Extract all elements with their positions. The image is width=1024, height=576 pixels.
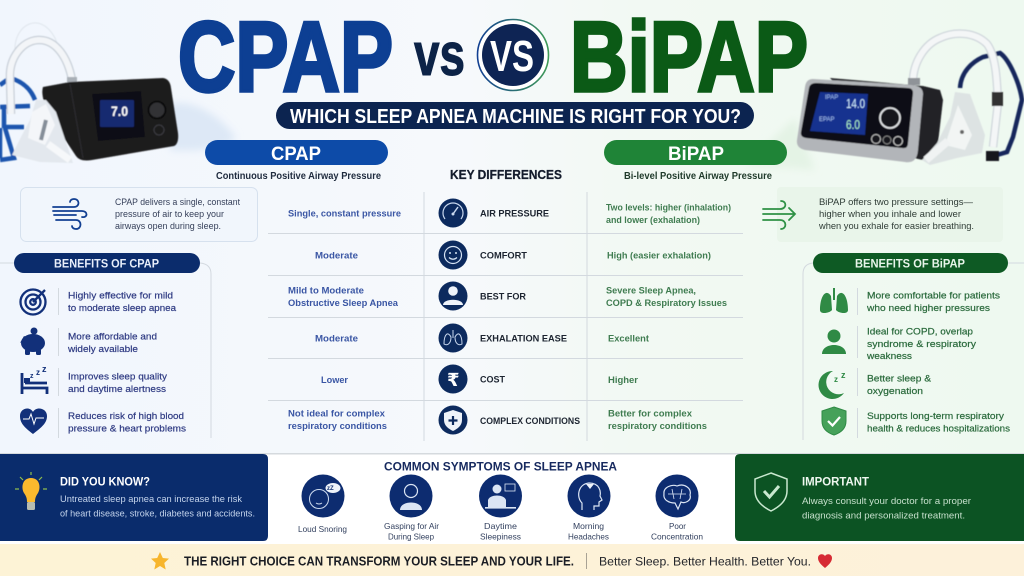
icon: person	[438, 282, 468, 310]
icon: star	[151, 552, 169, 570]
column: criteria: COST	[480, 374, 505, 386]
panel: BiPAP description	[763, 187, 1003, 242]
text: BiPAP description: BiPAP offers two pressure settings—	[819, 197, 973, 208]
benefit list: BiPAP: More comfortable for patients	[867, 290, 1000, 302]
column: CPAP values: Moderate	[315, 250, 358, 262]
text: did you know body: Untreated sleep apnea can increase the risk	[60, 494, 242, 505]
benefit list: BiPAP: Supports long-term respiratory	[867, 411, 1004, 422]
column: BiPAP values: Two levels: higher (inhalation)	[606, 202, 731, 214]
symptom: gasping for air: Gasping for Air	[384, 521, 439, 531]
header: BiPAP column: Bi-level Positive Airway Pressure	[624, 171, 772, 182]
panel: common symptoms	[298, 460, 703, 542]
icon: lungs	[438, 324, 468, 352]
column: BiPAP values: Higher	[608, 375, 638, 386]
benefit list: CPAP: and daytime alertness	[68, 384, 166, 395]
text: BiPAP description	[818, 197, 974, 232]
illustration: CPAP machine with mask	[0, 23, 178, 163]
icon: wind	[53, 199, 86, 229]
benefit list: CPAP: Improves sleep quality	[68, 372, 167, 382]
panel: benefits of BiPAP	[803, 253, 1024, 440]
machine display readings	[819, 95, 865, 132]
icon: lungs	[820, 288, 848, 313]
benefit list: CPAP: More affordable and	[68, 332, 157, 342]
machine display readings: IPAP	[825, 95, 838, 101]
column: criteria: EXHALATION EASE	[480, 334, 567, 344]
column: criteria: BEST FOR	[480, 292, 526, 302]
panel: CPAP description	[20, 188, 258, 242]
header: CPAP column	[205, 140, 388, 182]
machine display readings: 6.0	[846, 117, 860, 132]
comparison table	[268, 192, 743, 441]
text: CPAP description: airways open during sleep.	[115, 221, 221, 232]
benefit list: BiPAP: health & reduces hospitalizations	[867, 424, 1010, 434]
illustration: BiPAP machine with mask	[797, 34, 1022, 165]
icon: moon with zz	[819, 370, 846, 399]
icon: moon with zz: z	[834, 375, 838, 384]
benefit list: BiPAP: Better sleep &	[867, 374, 932, 384]
heading: benefits of CPAP: BENEFITS OF CPAP	[54, 258, 159, 270]
text: important body: diagnosis and personalized treatment.	[802, 510, 965, 522]
title: BiPAP: BiPAP	[570, 1, 808, 112]
title: vs: vs	[414, 21, 465, 88]
column: CPAP values: Obstructive Sleep Apnea	[288, 298, 399, 309]
machine display reading: 7.0	[111, 103, 128, 119]
symptom: loud snoring: Loud Snoring	[298, 524, 347, 534]
text: BiPAP description: when you exhale for easier breathing.	[818, 221, 974, 232]
column: BiPAP values: and lower (exhalation)	[606, 215, 700, 226]
column: CPAP values: Single, constant pressure	[288, 208, 401, 220]
icon: person breathing	[822, 330, 846, 354]
column: CPAP values: respiratory conditions	[288, 421, 387, 432]
icon: rupee: ₹	[447, 370, 460, 391]
header: BiPAP column	[604, 140, 787, 182]
icon: shield with check	[822, 407, 846, 435]
text: BiPAP description: higher when you inhale and lower	[819, 209, 961, 220]
symptom: daytime sleepiness: Sleepiness	[480, 532, 521, 542]
icon: heart	[818, 554, 832, 568]
symptom: loud snoring: zZ	[327, 486, 334, 492]
text: important body	[802, 496, 971, 522]
benefit list: CPAP: Highly effective for mild	[68, 290, 173, 302]
icon: shield with check	[755, 473, 787, 511]
text: CPAP description: CPAP delivers a single, constant	[115, 197, 240, 208]
column: BiPAP values: Better for complex	[608, 408, 693, 420]
icon: piggy bank	[20, 328, 45, 355]
column: CPAP values: Mild to Moderate	[288, 286, 364, 296]
badge: VS circle: VS	[490, 32, 534, 81]
column: BiPAP values: Severe Sleep Apnea,	[606, 286, 696, 296]
icon: heart with pulse	[20, 409, 47, 434]
benefit list: BiPAP: syndrome & respiratory	[867, 339, 976, 350]
benefit list: BiPAP	[866, 290, 1010, 434]
icon: bed with zzz: z	[30, 373, 34, 380]
benefit list: CPAP: pressure & heart problems	[68, 424, 186, 434]
text: CPAP description	[115, 197, 240, 232]
heading: benefits of BiPAP	[813, 253, 1008, 273]
text: important body: Always consult your doctor for a proper	[802, 496, 971, 507]
benefit list: CPAP: Reduces risk of high blood	[68, 411, 184, 422]
column: CPAP values	[288, 208, 401, 432]
panel: did you know	[0, 454, 268, 541]
footer banner: Better Sleep. Better Health. Better You.	[599, 554, 811, 568]
panel: benefits of CPAP	[0, 253, 211, 438]
machine display readings: EPAP	[819, 117, 835, 123]
column: criteria	[480, 208, 580, 427]
benefit list: BiPAP: weakness	[866, 351, 912, 362]
subtitle banner: WHICH SLEEP APNEA MACHINE IS RIGHT FOR YOU?	[290, 105, 741, 128]
text: did you know body: of heart disease, stroke, diabetes and accidents.	[60, 508, 255, 520]
column: BiPAP values: High (easier exhalation)	[607, 250, 711, 262]
column: CPAP values: Not ideal for complex	[288, 408, 386, 420]
benefit list: CPAP: widely available	[67, 344, 138, 355]
symptom: loud snoring	[298, 474, 347, 534]
column: criteria: COMPLEX CONDITIONS	[480, 416, 580, 427]
column: CPAP values: Lower	[321, 375, 348, 386]
symptom: gasping for air	[384, 474, 439, 542]
column: criteria: COMFORT	[480, 250, 527, 262]
column: CPAP values: Moderate	[315, 334, 358, 344]
icon: gauge	[438, 198, 468, 228]
icon: bed with zzz: z	[36, 368, 40, 377]
symptom: morning headaches: Headaches	[568, 532, 609, 542]
header: CPAP column: CPAP	[271, 144, 321, 165]
icon: medical shield	[438, 406, 468, 434]
icon: rupee	[438, 364, 468, 394]
symptom: morning headaches: Morning	[573, 521, 604, 531]
benefit list: CPAP: to moderate sleep apnea	[68, 303, 177, 314]
heading: common symptoms: COMMON SYMPTOMS OF SLEEP APNEA	[384, 460, 617, 474]
column: BiPAP values: respiratory conditions	[608, 421, 707, 432]
symptom: daytime sleepiness: Daytime	[484, 521, 517, 531]
panel: important: IMPORTANT	[802, 474, 870, 488]
column: criteria: AIR PRESSURE	[480, 208, 549, 220]
header: CPAP column: Continuous Positive Airway Pressure	[216, 171, 381, 182]
footer banner	[0, 544, 1024, 576]
symptom: poor concentration: Concentration	[651, 532, 703, 542]
icon: green airflow arrows	[763, 201, 795, 229]
icon: bed with zzz: z	[42, 364, 47, 374]
benefit list: BiPAP: who need higher pressures	[866, 303, 990, 314]
symptom: poor concentration: Poor	[669, 521, 686, 531]
heading: key differences: KEY DIFFERENCES	[450, 168, 562, 182]
badge: VS circle	[478, 20, 548, 90]
symptom: gasping for air: During Sleep	[388, 532, 434, 542]
column: BiPAP values: Excellent	[608, 334, 650, 344]
title: CPAP: CPAP	[178, 1, 393, 112]
column: BiPAP values: COPD & Respiratory Issues	[606, 298, 727, 309]
benefit list: BiPAP: Ideal for COPD, overlap	[867, 326, 973, 338]
panel: did you know: DID YOU KNOW?	[60, 474, 150, 488]
panel: important	[735, 454, 1024, 541]
heading: benefits of BiPAP: BENEFITS OF BiPAP	[855, 258, 965, 270]
icon: target	[20, 290, 46, 314]
icon: smiley	[438, 240, 468, 270]
column: BiPAP values	[606, 202, 731, 432]
icon: light bulb	[15, 472, 47, 510]
icon: bed with zzz	[22, 364, 47, 394]
symptom: daytime sleepiness	[479, 474, 522, 542]
symptom: morning headaches	[568, 474, 610, 542]
text: CPAP description: pressure of air to keep your	[115, 209, 224, 220]
header: BiPAP column: BiPAP	[668, 144, 724, 165]
heading: benefits of CPAP	[14, 253, 200, 273]
icon: moon with zz: z	[841, 370, 846, 380]
footer banner: THE RIGHT CHOICE CAN TRANSFORM YOUR SLEEP AND YOUR LIFE.	[184, 554, 574, 568]
benefit list: CPAP	[67, 290, 186, 434]
machine display readings: 14.0	[846, 96, 865, 111]
benefit list: BiPAP: oxygenation	[867, 386, 923, 397]
text: did you know body	[60, 494, 255, 520]
symptom: poor concentration	[651, 474, 703, 542]
